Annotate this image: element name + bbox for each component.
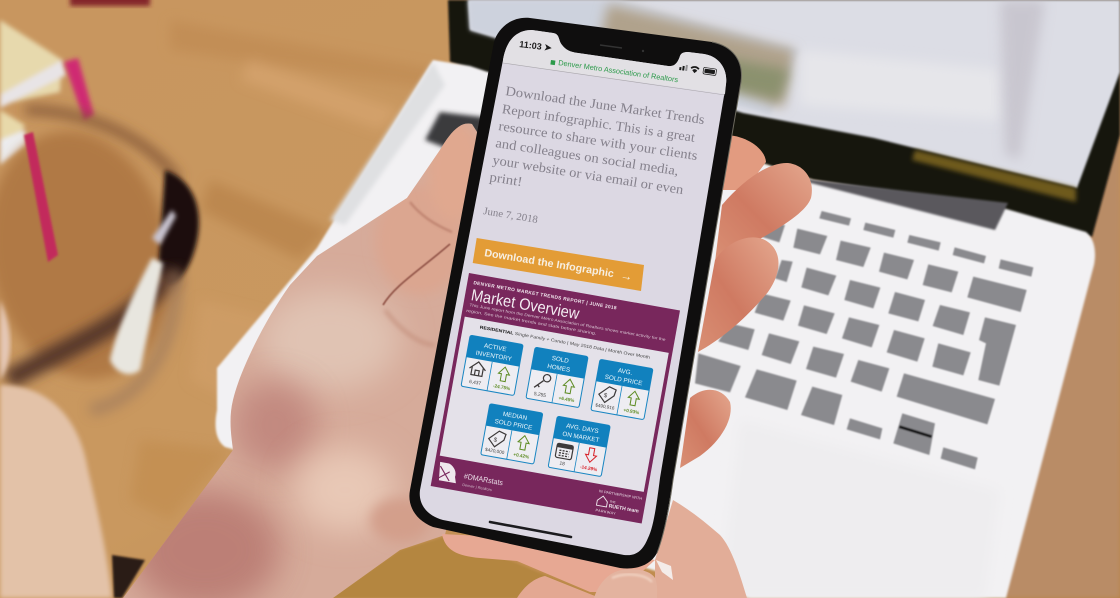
finger 2: [715, 163, 812, 262]
download button: →: [620, 268, 634, 284]
right fingers behind phone: [680, 135, 812, 468]
article paragraph: [489, 83, 706, 197]
card: avg sold price: +0.93%: [623, 407, 641, 415]
card: avg days on market: -14.29%: [580, 464, 598, 472]
panel kicker: DENVER METRO MARKET TRENDS REPORT | JUNE 2018: [473, 280, 617, 312]
card: median sold price: [481, 404, 543, 464]
home indicator: [490, 522, 571, 537]
left hand palm and thumb: [123, 124, 478, 598]
speaker and camera in notch: [600, 45, 644, 52]
finger 4: [680, 390, 731, 468]
footer logo: [437, 462, 459, 483]
site name: Denver Metro Association of Realtors: [558, 58, 679, 84]
screen: [420, 30, 726, 555]
pink pen: [24, 132, 58, 262]
card: avg sold price: SOLD PRICE: [604, 374, 643, 387]
article paragraph: and colleagues on social media,: [495, 135, 680, 178]
partner logo: PARKWAY: [595, 508, 617, 516]
card: avg sold price: $490,916: [595, 402, 615, 411]
card: avg sold price: [591, 359, 653, 420]
finger 3: [698, 237, 778, 352]
blurred objects on table: paper, pens, glasses: [0, 0, 199, 598]
card: active inventory: INVENTORY: [475, 350, 513, 363]
partner logo: [595, 495, 641, 520]
glasses lens and frame: [0, 110, 199, 410]
article paragraph: Download the June Market Trends: [505, 83, 706, 127]
card: median sold price: $: [493, 437, 498, 444]
download button: Download the Infographic: [484, 247, 615, 280]
red book: [70, 0, 150, 6]
article paragraph: Report infographic. This is a great: [501, 101, 696, 145]
card: avg days on market: ON MARKET: [562, 431, 600, 444]
keyboard: [695, 211, 1033, 469]
footer small text: Denver | Realtors: [462, 483, 492, 492]
panel intro: region. See the market trends and stats before sharing.: [466, 308, 597, 336]
status icons: [679, 64, 717, 76]
card: median sold price: MEDIAN: [502, 411, 528, 422]
card: median sold price: +0.42%: [513, 452, 530, 460]
laptop base: [216, 60, 1095, 598]
residential subheading: RESIDENTIAL Single Family + Condo | May 2018 Data | Month Over Month: [479, 325, 651, 360]
card: avg sold price: $: [603, 392, 608, 400]
card: active inventory: ACTIVE: [483, 342, 507, 353]
infographic: Market Overview panel: [431, 273, 680, 524]
partner logo: THE: [609, 499, 616, 504]
article paragraph: resource to share with your clients: [498, 118, 699, 163]
thumb tip in front of phone: [594, 569, 657, 598]
partner logo: RUETH team: [608, 503, 640, 515]
partner credit: IN PARTNERSHIP WITH: [599, 489, 643, 501]
panel intro: This June report from the Denver Metro Association of Realtors shows market activity for the: [469, 302, 667, 342]
blurred person shoulder: [0, 385, 112, 598]
lock icon: [550, 60, 555, 65]
card: sold homes: 5,255: [533, 391, 547, 399]
card: sold homes: [526, 347, 588, 408]
clock: 11:03 ➤: [519, 39, 553, 53]
article paragraph: print!: [489, 169, 523, 189]
card: active inventory: 6,437: [468, 379, 482, 387]
right thumb: [655, 500, 747, 598]
card: median sold price: SOLD PRICE: [494, 418, 533, 432]
card: avg days on market: AVG. DAYS: [565, 423, 599, 435]
card: avg days on market: 18: [559, 461, 566, 467]
download button: [473, 238, 644, 291]
hashtag: #DMARstats: [463, 472, 504, 487]
lower hand behind phone: [442, 500, 747, 598]
card: avg days on market: [548, 416, 610, 477]
date: June 7, 2018: [483, 206, 539, 226]
content area: [440, 317, 669, 492]
cream papers: [0, 20, 66, 165]
laptop display with blurred page: [448, 0, 1120, 237]
card: median sold price: $420,000: [485, 447, 505, 455]
card: active inventory: [461, 335, 523, 396]
pink pen top: [64, 58, 94, 120]
phone body: [409, 18, 741, 568]
card: sold homes: +6.45%: [558, 395, 576, 403]
article paragraph: your website or via email or even: [492, 152, 685, 197]
panel intro: [466, 302, 667, 348]
finger 1: [715, 135, 766, 190]
glasses temple white: [110, 258, 163, 374]
card: sold homes: SOLD: [551, 355, 570, 365]
card: active inventory: -24.75%: [493, 383, 511, 391]
card: avg sold price: AVG.: [617, 367, 633, 377]
panel title: Market Overview: [470, 286, 581, 323]
status bar header: [503, 30, 726, 94]
card: sold homes: HOMES: [547, 363, 571, 374]
